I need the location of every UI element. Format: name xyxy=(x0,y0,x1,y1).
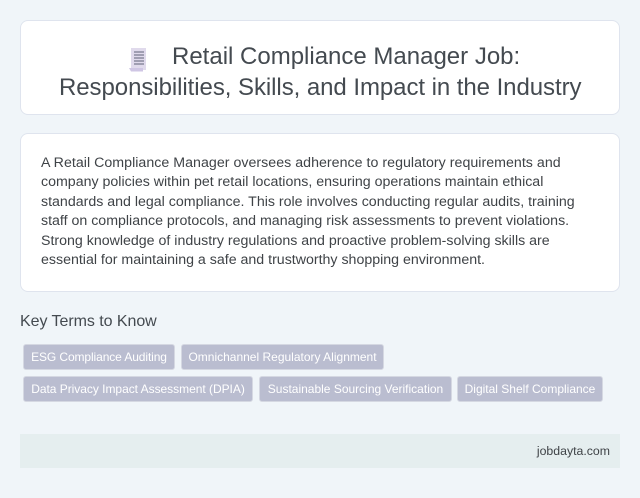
panel: description card xyxy=(20,133,620,292)
description text xyxy=(41,155,575,268)
footer bar xyxy=(20,434,620,468)
footer text: jobdayta.com xyxy=(537,444,610,458)
tag xyxy=(23,344,175,370)
description text: staff on compliance protocols, and managing risk assessments to prevent violations. xyxy=(41,213,569,229)
tag xyxy=(23,376,253,402)
description text: A Retail Compliance Manager oversees adherence to regulatory requirements and xyxy=(41,155,561,171)
description text: company policies within pet retail locations, ensuring operations maintain ethical xyxy=(41,174,543,190)
description text: Strong knowledge of industry regulations and proactive problem-solving skills are xyxy=(41,233,550,249)
heading: key terms: Key Terms to Know xyxy=(20,313,157,330)
title line 1: Retail Compliance Manager Job: xyxy=(172,43,520,70)
icon: scroll document xyxy=(129,48,146,72)
description text: standards and legal compliance. This role involves conducting regular audits, training xyxy=(41,194,575,210)
tag: Sustainable Sourcing Verification xyxy=(268,382,443,396)
tag: ESG Compliance Auditing xyxy=(31,350,167,364)
tag: Digital Shelf Compliance xyxy=(465,382,595,396)
description text: essential for maintaining a safe and trustworthy shopping environment. xyxy=(41,252,485,268)
tag xyxy=(457,376,603,402)
title line 2: Responsibilities, Skills, and Impact in the Industry xyxy=(59,74,581,101)
tag: Data Privacy Impact Assessment (DPIA) xyxy=(31,382,245,396)
tag: Omnichannel Regulatory Alignment xyxy=(188,350,377,364)
panel: title card xyxy=(20,20,620,115)
tag xyxy=(259,376,452,402)
tag xyxy=(181,344,384,370)
tag group xyxy=(23,344,603,402)
